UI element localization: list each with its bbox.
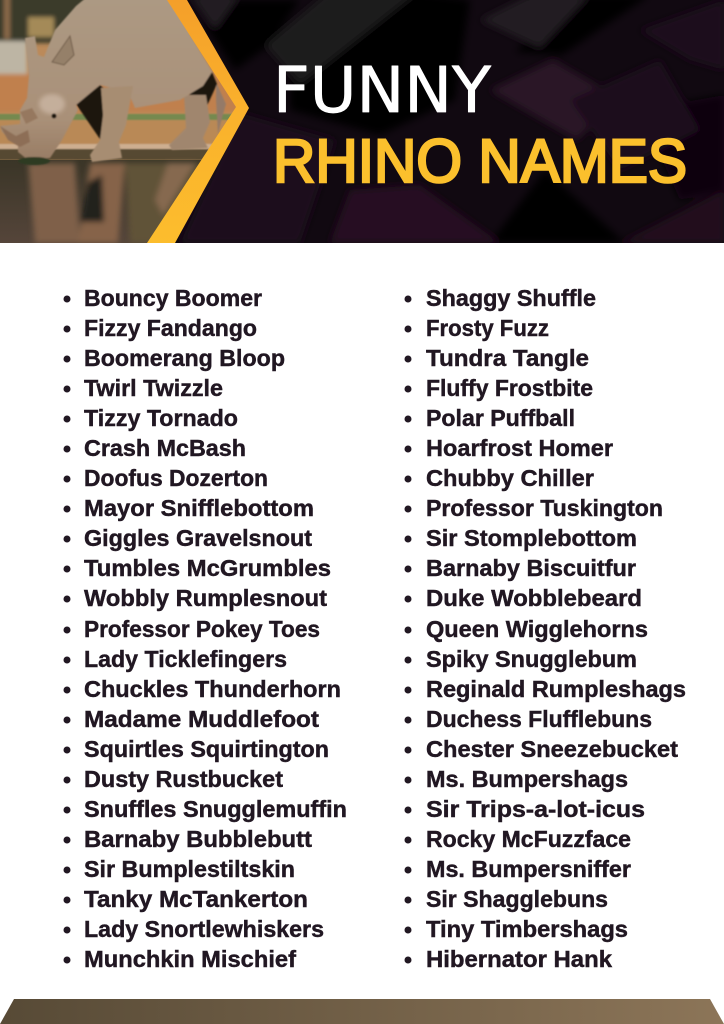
footer bar <box>0 999 724 1024</box>
horn <box>0 126 30 147</box>
header dark banner <box>175 0 724 243</box>
name list: right column: Chubby Chiller <box>426 465 594 491</box>
name list: left column: Mayor Snifflebottom <box>84 495 314 521</box>
name list: right column: Queen Wigglehorns <box>426 616 648 642</box>
name list: left column <box>64 285 347 972</box>
name list: left column: Crash McBash <box>84 435 246 461</box>
name list: left column: Dusty Rustbucket <box>84 766 283 792</box>
name list: left column: Tumbles McGrumbles <box>84 555 331 581</box>
name list: right column: Shaggy Shuffle <box>426 285 596 311</box>
photo background foliage <box>0 0 245 112</box>
name list: left column: Madame Muddlefoot <box>84 706 319 732</box>
name list: right column <box>404 285 686 972</box>
name list: left column: Snuffles Snugglemuffin <box>84 796 347 822</box>
name list: left column: Tizzy Tornado <box>84 405 238 431</box>
yellow chevron <box>147 0 249 243</box>
front leg <box>90 86 133 162</box>
face highlight <box>39 94 65 114</box>
name list: right column: Reginald Rumpleshags <box>426 676 686 702</box>
mouth shadow <box>18 157 50 165</box>
name list: right column: Tundra Tangle <box>426 345 589 371</box>
name list: left column: Boomerang Bloop <box>84 345 285 371</box>
name list: right column: Duchess Flufflebuns <box>426 706 652 732</box>
name list: right column: Sir Stomplebottom <box>426 525 637 551</box>
name list: right column: Tiny Timbershags <box>426 916 628 942</box>
name list: left column: Giggles Gravelsnout <box>84 525 312 551</box>
name list: right column: Fluffy Frostbite <box>426 375 593 401</box>
name list: right column: Spiky Snugglebum <box>426 646 637 672</box>
name list: left column: Lady Ticklefingers <box>84 646 287 672</box>
hind leg <box>169 95 210 150</box>
photo grass and ground <box>0 114 233 160</box>
name list: left column: Doofus Dozerton <box>84 465 268 491</box>
name list: right column: Chester Sneezebucket <box>426 736 678 762</box>
ear <box>52 36 74 65</box>
water with reflection <box>0 160 202 243</box>
name list: left column: Professor Pokey Toes <box>84 616 320 642</box>
eye <box>52 114 56 118</box>
name list: right column: Ms. Bumpershags <box>426 766 628 792</box>
far hind leg <box>216 82 226 134</box>
rhino figure <box>0 0 226 165</box>
name list: left column: Chuckles Thunderhorn <box>84 676 341 702</box>
name list: right column: Frosty Fuzz <box>426 315 549 341</box>
name list: left column: Twirl Twizzle <box>84 375 223 401</box>
name list: right column: Hoarfrost Homer <box>426 435 613 461</box>
name list: left column: Tanky McTankerton <box>84 886 308 912</box>
name list: right column: Barnaby Biscuitfur <box>426 555 636 581</box>
name list: left column: Munchkin Mischief <box>84 946 296 972</box>
rhino photograph <box>0 0 245 243</box>
name list: left column: Fizzy Fandango <box>84 315 257 341</box>
title: FUNNY: FUNNY <box>273 54 492 127</box>
name list: left column: Bouncy Boomer <box>84 285 262 311</box>
name list: left column: Sir Bumplestiltskin <box>84 856 295 882</box>
name list: right column: Rocky McFuzzface <box>426 826 631 852</box>
rhino body and head silhouette <box>0 0 212 160</box>
name list: right column: Sir Shagglebuns <box>426 886 608 912</box>
name list: left column: Barnaby Bubblebutt <box>84 826 312 852</box>
dark belly shadow <box>76 85 106 142</box>
title: RHINO NAMES: RHINO NAMES <box>273 127 687 195</box>
name list: right column: Hibernator Hank <box>426 946 612 972</box>
name list: left column: Wobbly Rumplesnout <box>84 585 327 611</box>
name list: right column: Sir Trips-a-lot-icus <box>426 796 645 822</box>
name list: right column: Ms. Bumpersniffer <box>426 856 631 882</box>
name list: left column: Squirtles Squirtington <box>84 736 329 762</box>
name list: left column: Lady Snortlewhiskers <box>84 916 324 942</box>
name list: right column: Polar Puffball <box>426 405 575 431</box>
name list: right column: Duke Wobblebeard <box>426 585 642 611</box>
name list: right column: Professor Tuskington <box>426 495 663 521</box>
